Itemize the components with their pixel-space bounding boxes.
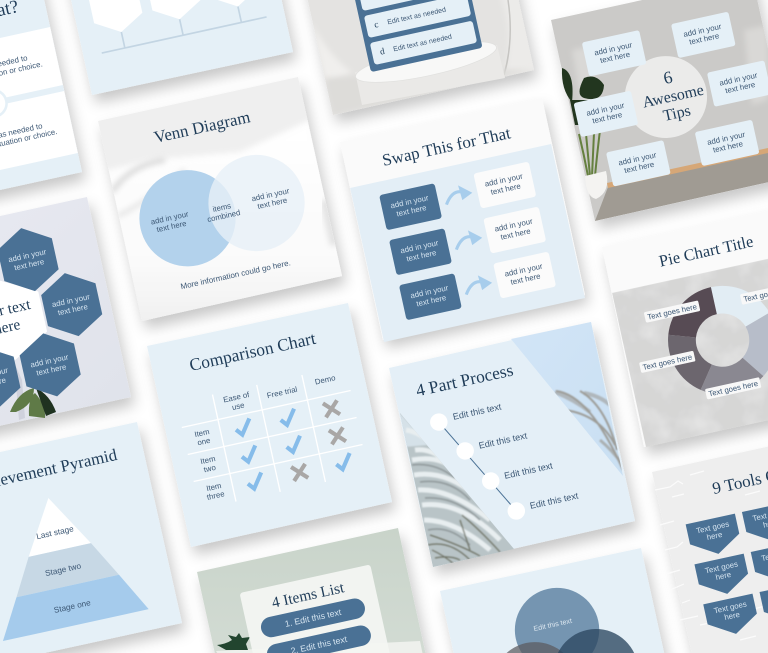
swap row 2: text here: [406, 248, 437, 263]
item 1: 1. Edit this text: [284, 607, 343, 629]
row labels: Item: [194, 427, 210, 439]
step 1: [428, 400, 504, 432]
tip box 3: [707, 60, 768, 107]
left label: text here: [156, 219, 187, 234]
right label: text here: [257, 196, 288, 211]
item 2: [265, 624, 373, 653]
tip box 2: text here: [688, 31, 720, 47]
tool 3: here: [715, 570, 732, 582]
swap row 3: add in your: [409, 283, 450, 300]
title: Awesome: [641, 82, 705, 112]
step 3: [480, 459, 555, 491]
tool 6: [760, 581, 768, 627]
title: Swap This for That: [380, 123, 513, 170]
row labels: three: [206, 489, 225, 502]
tip box 1: add in your: [593, 40, 633, 57]
title: Tips: [662, 102, 692, 125]
swap row 1: text here: [396, 203, 427, 218]
row labels: Item: [200, 454, 216, 466]
title: Pie Chart Title: [657, 232, 755, 271]
tool 1: [686, 514, 743, 559]
hexagon 3: text here: [35, 362, 67, 378]
swap row 3: add in your: [504, 262, 544, 279]
hexagon 3: [16, 327, 84, 402]
check marks: [234, 399, 353, 490]
row labels: two: [203, 463, 217, 474]
pedestal: [353, 33, 505, 105]
overlap label: [204, 200, 241, 224]
overlap label: combined: [206, 208, 241, 224]
panel: swap this for that: [340, 98, 585, 342]
right label: add in your: [251, 186, 291, 203]
panel: achievement pyramid: [0, 422, 182, 653]
hexagon 4: [0, 341, 24, 416]
hexagon 3: add in your: [29, 352, 70, 369]
tip box 3: text here: [724, 80, 756, 95]
swap row 2: add in your: [494, 217, 534, 234]
panel: this or that: [0, 0, 82, 216]
tip box 5: [695, 120, 759, 166]
tip box 4: [574, 91, 638, 137]
tip box 3: add in your: [718, 71, 759, 88]
hexagon 2: [38, 267, 106, 342]
list panel: [343, 0, 483, 72]
tool 4: [751, 541, 768, 587]
title: 4 Part Process: [414, 360, 515, 400]
row c: Edit text as needed: [387, 7, 447, 26]
item 1: [259, 597, 367, 639]
panel: hexagon timeline: [48, 0, 293, 95]
swap row 3: text here: [510, 271, 541, 287]
textured background: [612, 249, 768, 447]
title: Comparison Chart: [187, 328, 318, 375]
left label: add in your: [150, 209, 190, 227]
swap row 1: add in your: [484, 172, 524, 189]
chart: pyramid: Stage one: [53, 598, 92, 615]
column headers: [222, 371, 338, 414]
step 3: Edit this text: [503, 460, 554, 481]
hexagon 2: add in your: [51, 292, 91, 309]
pampas photo: [398, 411, 514, 567]
white answer area: [0, 27, 78, 197]
caption: More information could go here.: [180, 258, 292, 291]
panel: comparison chart: [147, 303, 392, 547]
chart: donut: [658, 275, 768, 405]
left label: [150, 209, 192, 235]
hexagon 1: text here: [13, 257, 45, 272]
floor: [216, 641, 432, 653]
overlap label: items: [212, 201, 232, 214]
row c: [373, 4, 447, 30]
tip box 2: [671, 12, 736, 58]
hexagon 2: text here: [57, 302, 89, 317]
row labels: one: [197, 436, 211, 447]
panel: pie chart: [602, 203, 768, 447]
row c: c: [373, 19, 379, 30]
blue band: [350, 144, 585, 342]
tool 2: [742, 501, 768, 547]
tip box 6: text here: [623, 160, 655, 175]
tool 5: [703, 594, 760, 639]
hexagon 1: add in your: [7, 247, 47, 264]
chart: three circles: Edit this text: [533, 617, 573, 633]
label 2: Text goes here: [642, 352, 693, 372]
icon: potted plant: [562, 68, 607, 199]
swap row 2: add in your: [400, 238, 440, 255]
icon: leaves: [10, 362, 56, 420]
icon: hexagons: [85, 0, 262, 37]
label 3: Text goes here: [708, 379, 759, 398]
swap row 3: [399, 252, 556, 320]
panel: list on pedestal photo: [289, 0, 540, 115]
cross marks: [279, 400, 352, 481]
column headers: Ease of: [222, 390, 251, 405]
tip box 5: text here: [712, 139, 744, 155]
panel: hexagon cluster: [0, 197, 131, 441]
title: 4 Items List: [270, 579, 347, 612]
swap row 1: [379, 162, 537, 230]
swap row 2: [389, 206, 546, 275]
step 4: Edit this text: [529, 490, 580, 511]
panel: 4 part process: [389, 322, 635, 567]
connector: [439, 410, 516, 523]
table grid: [176, 366, 369, 509]
swap row 3: text here: [415, 293, 447, 308]
floor: [595, 152, 768, 221]
sky photo corner: [511, 322, 623, 476]
icon: divider circle: [0, 88, 9, 119]
panel: overlapping circles: [440, 548, 685, 653]
tool 3: [694, 554, 751, 599]
cracked texture: [655, 471, 765, 640]
chart: venn circles: [130, 146, 314, 276]
title: Venn Diagram: [152, 107, 252, 147]
swap row 2: text here: [500, 226, 531, 242]
tip box 6: [606, 140, 671, 187]
tool 3: Text goes: [704, 559, 739, 575]
step 2: [455, 429, 530, 461]
tip box 1: text here: [599, 50, 631, 65]
row d: [379, 31, 453, 57]
swap row 1: add in your: [390, 193, 430, 210]
hexagon 1: [0, 222, 62, 297]
column headers: use: [231, 401, 245, 412]
row labels: [192, 427, 225, 502]
title: 6: [661, 67, 675, 88]
tool 5: here: [724, 610, 741, 622]
chart: pyramid: Last stage: [35, 524, 75, 541]
tool 1: here: [706, 530, 723, 542]
chart: pyramid: [0, 482, 149, 641]
panel: 6 awesome tips: [551, 0, 768, 221]
step 4: [506, 489, 581, 521]
row d: d: [379, 46, 386, 57]
panel: venn diagram: [98, 77, 360, 340]
right label: [251, 186, 292, 212]
column headers: Demo: [314, 373, 337, 387]
row d: Edit text as needed: [393, 34, 453, 53]
tip box 4: text here: [591, 110, 623, 125]
chart: pyramid: Stage two: [44, 561, 82, 578]
step 1: Edit this text: [452, 401, 503, 422]
tip box 2: add in your: [682, 22, 723, 39]
panel: 4 items list: [197, 528, 442, 653]
tip box 5: add in your: [706, 130, 746, 147]
tip box 6: add in your: [618, 150, 658, 167]
center hexagon: [0, 272, 52, 369]
chart: three circles: [474, 574, 646, 653]
tool 5: Text goes: [713, 599, 748, 615]
label 1: Text goes here: [646, 302, 698, 322]
icon: small plant: [217, 633, 250, 650]
row labels: Item: [205, 481, 222, 493]
title: [636, 61, 709, 129]
list card: [240, 564, 403, 653]
step 2: Edit this text: [478, 430, 528, 451]
tip box 4: add in your: [586, 101, 626, 118]
tip box 1: [582, 30, 647, 77]
center circle: [617, 48, 715, 146]
column headers: Free trial: [266, 385, 298, 400]
tool 1: Text goes: [695, 519, 730, 535]
swap row 1: text here: [490, 181, 522, 197]
panel: 9 tools: [652, 428, 768, 653]
